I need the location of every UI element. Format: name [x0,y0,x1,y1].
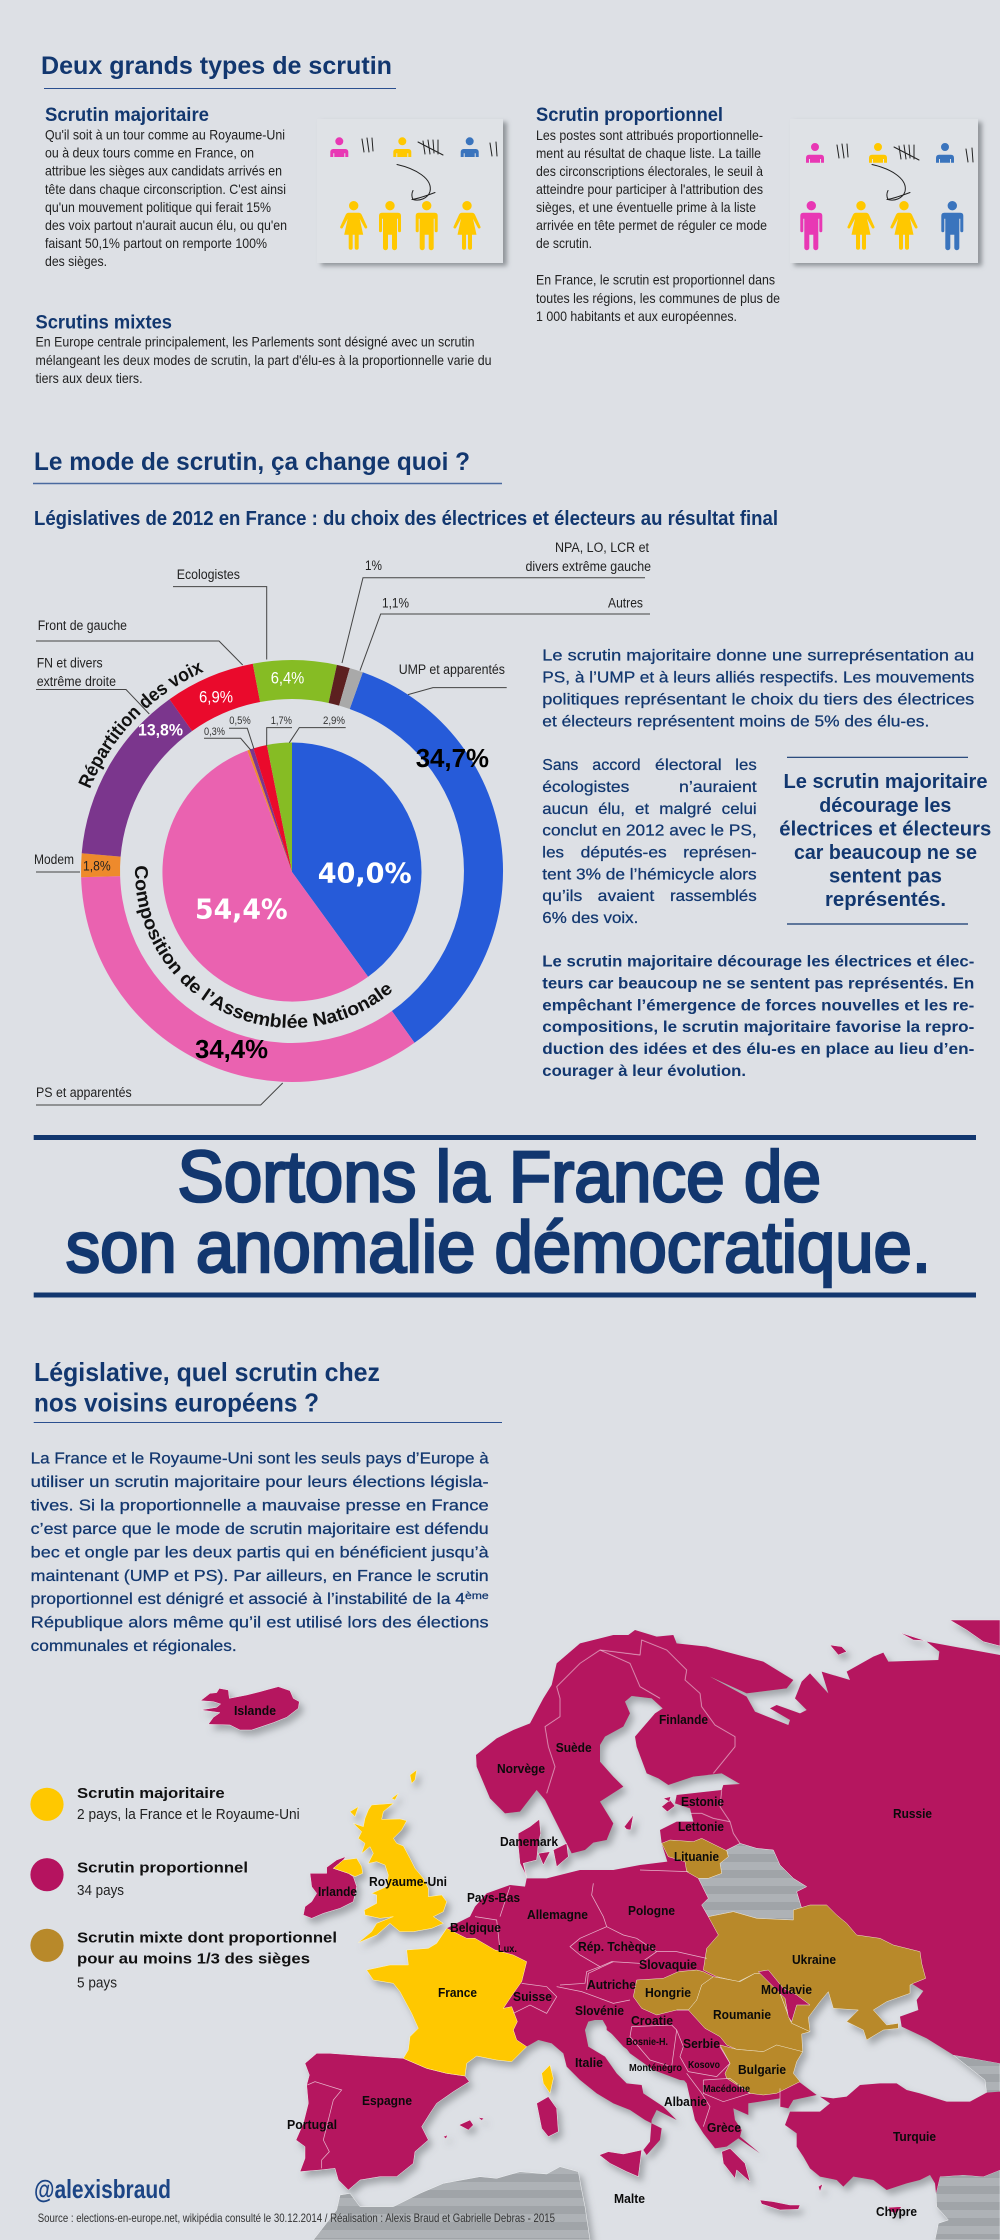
map country labels: Grèce [707,2121,741,2135]
main slogan banner: son anomalie démocratique. [66,1208,931,1288]
map country labels: Royaume-Uni [369,1875,447,1889]
legend item: proportionnel [30,1858,248,1899]
map country labels: Albanie [664,2095,707,2109]
text block: scrutins mixtes: En Europe centrale principalement, les Parlements sont désigné avec un scrutin [36,334,474,350]
map country labels: Turquie [893,2130,936,2144]
panel: illustration scrutin proportionnel [790,119,978,263]
text block: accord électoral: représen- [683,844,757,862]
map country labels: Roumanie [713,2008,771,2022]
callout labels and leader lines: UMP et apparentés [399,662,505,677]
text block: reproduction des élus: compositions, le scrutin majoritaire favorise la repro- [542,1019,974,1036]
callout labels and leader lines: PS et apparentés [36,1085,132,1100]
text block: accord électoral: malgré [659,801,712,818]
value labels: 6,4% [271,669,304,688]
text block: scrutin proportionnel: Scrutin proportionnel [536,104,723,126]
text block: scrutin proportionnel: atteindre pour participer à l'attribution des [536,181,763,197]
callout labels and leader lines: 0,5% [229,715,251,727]
legend item: majoritaire: 2 pays, la France et le Royaume-Uni [77,1806,300,1823]
map country labels: Slovénie [575,2004,624,2018]
map country labels: Slovaquie [639,1958,697,1972]
legend item: mixte: Scrutin mixte dont proportionnel [77,1930,337,1947]
map country labels: Bulgarie [738,2063,786,2077]
map country labels: Lettonie [678,1820,724,1834]
text block: France et Royaume-Uni: tives. Si la proportionnelle a mauvaise presse en France [31,1498,489,1515]
map country labels: Malte [614,2192,645,2206]
Lithuania [662,1838,728,1878]
section heading: voisins européens [34,1357,502,1422]
subtitle: Législatives 2012: Législatives de 2012 en France : du choix des électrices et électeurs au résultat final [34,508,778,530]
text block: accord électoral: et [635,801,650,818]
ring: répartition des voix [81,660,503,1082]
text block: scrutin proportionnel: de scrutin. [536,235,592,251]
curved labels: Composition de l’Assemblée Nationale [134,866,392,1028]
text block: scrutin proportionnel: 1 000 habitants et aux européennes. [536,308,737,324]
text block: reproduction des élus [542,954,974,1080]
callout labels and leader lines: 1% [365,558,382,573]
text block: scrutin proportionnel [536,104,780,324]
text block: surreprésentation [542,648,974,730]
map country labels: Suisse [513,1990,552,2004]
section heading: Le mode de scrutin: Le mode de scrutin, ça change quoi ? [34,448,470,476]
value labels: 1,8% [83,857,111,873]
map country labels: Irlande [318,1885,357,1899]
text block: accord électoral: électoral [655,757,722,774]
text block: scrutins mixtes [36,312,492,386]
text block: scrutin proportionnel: toutes les régions, les communes de plus de [536,290,780,306]
legend item: mixte: pour au moins 1/3 des sièges [77,1950,310,1967]
text block: scrutins mixtes: tiers aux deux tiers. [36,370,142,386]
text block: accord électoral: les [735,757,757,774]
main slogan banner [34,1135,976,1298]
Romania [688,1973,810,2052]
text block: scrutin majoritaire: Scrutin majoritaire [45,104,209,126]
value labels: 13,8% [138,721,183,740]
map country labels: Macédoine [703,2083,750,2095]
map country labels: Pologne [628,1904,675,1918]
text block: accord électoral: les [542,844,564,862]
callout labels and leader lines [34,540,651,1105]
text block: scrutin proportionnel: arrivée en tête permet de réguler ce mode [536,217,767,233]
value labels: 54,4% [195,892,288,926]
text block: scrutins mixtes: Scrutins mixtes [36,312,172,334]
text block: reproduction des élus: empêchant l’émergence de forces nouvelles et les re- [542,997,974,1014]
map country labels: Monténégro [629,2062,682,2074]
curved labels [78,662,392,1028]
callout: le scrutin majoritaire décourage: électrices et électeurs [779,819,991,841]
callout labels and leader lines: Ecologistes [177,567,240,582]
map country labels: Suède [556,1741,592,1755]
grey territories [313,2055,1000,2240]
callout labels and leader lines: divers extrême gauche [526,559,651,574]
callout labels and leader lines: Modem [34,852,74,867]
callout labels and leader lines: 0,3% [204,726,225,738]
callout: le scrutin majoritaire décourage: décourage les [819,795,951,817]
text block: surreprésentation: Le scrutin majoritaire donne une surreprésentation au [542,648,974,665]
map country labels: Serbie [683,2037,720,2051]
text block: France et Royaume-Uni: République alors même qu’il est utilisé lors des élections [31,1615,489,1632]
callout labels and leader lines: 1,1% [382,596,409,611]
text block: accord électoral: celui [722,801,757,818]
text block: reproduction des élus: teurs car beaucoup ne se sentent pas représentés. En [542,976,974,992]
callout: le scrutin majoritaire décourage [779,757,991,924]
value labels: 34,4% [195,1034,268,1064]
text block: reproduction des élus: courager à leur évolution. [542,1063,746,1080]
map country labels: Lux. [498,1943,517,1955]
text block: accord électoral: écologistes [542,779,629,796]
text block: scrutin proportionnel: En France, le scrutin est proportionnel dans [536,272,775,288]
text block: France et Royaume-Uni: maintenant (UMP et PS). Par ailleurs, en France le scrutin [31,1568,489,1585]
text block: scrutin majoritaire: qu'un mouvement politique qui ferait 15% [45,199,271,215]
map country labels: Hongrie [645,1986,691,2000]
legend item: majoritaire: Scrutin majoritaire [77,1785,225,1802]
text block: France et Royaume-Uni [31,1450,489,1655]
map country labels [234,1704,936,2219]
Bulgaria [720,2045,803,2095]
Scandinavia, Russia, Poland, Baltic states [476,1620,1000,2063]
map country labels: Autriche [587,1978,636,1992]
Belarus [698,1843,807,1920]
map country labels: Moldavie [761,1983,812,1997]
legend item: mixte: 5 pays [77,1974,117,1991]
map country labels: Italie [575,2056,603,2070]
map country labels: Finlande [659,1713,708,1727]
text block: accord électoral: 6% des voix. [542,910,638,927]
Ukraine [703,1905,926,2040]
text block: accord électoral: n’auraient [679,779,757,796]
map country labels: Estonie [681,1795,724,1809]
callout labels and leader lines: extrême droite [37,674,116,689]
text block: surreprésentation: politiques représentant le choix du tiers des électrices [542,692,974,708]
text block: accord électoral: élu, [598,801,625,818]
value labels: 40,0% [318,857,412,890]
value labels [83,669,489,1064]
text block: accord électoral: députés-es [581,844,667,862]
text block: France et Royaume-Uni: utiliser un scrutin majoritaire pour leurs élections législa- [31,1474,489,1491]
map country labels: Bosnie-H. [626,2036,668,2048]
map country labels: Islande [234,1704,276,1718]
map country labels: France [438,1986,477,2000]
legend item: majoritaire [30,1785,300,1823]
text block: reproduction des élus: Le scrutin majoritaire décourage les électrices et élec- [542,954,974,971]
text block: reproduction des élus: duction des idées et des élu-es en place au lieu d’en- [542,1041,974,1058]
map country labels: Allemagne [527,1908,588,1922]
text block: scrutin majoritaire: des voix partout n'aurait aucun élu, ou qu'en [45,217,287,233]
main slogan banner: Sortons la France de [178,1138,821,1218]
callout labels and leader lines: Front de gauche [38,618,127,633]
map country labels: Belgique [450,1921,501,1935]
map country labels: Lituanie [674,1850,719,1864]
text block: France et Royaume-Uni: communales et régionales. [31,1638,237,1655]
section heading: Deux grands types de scrutin: Deux grands types de scrutin [41,52,392,80]
map country labels: Norvège [497,1762,545,1776]
text block: accord électoral: aucun [542,801,588,818]
legend item: proportionnel: 34 pays [77,1882,124,1899]
map country labels: Chypre [876,2205,917,2219]
map country labels: Kosovo [688,2059,720,2071]
text block: France et Royaume-Uni: ème [465,1591,489,1602]
Balkans, Turkey, Eastern Europe [607,1905,1000,2213]
callout: le scrutin majoritaire décourage: car beaucoup ne se [794,842,977,864]
text block: accord électoral: rassemblés [670,888,757,905]
text block: accord électoral: conclut en 2012 avec le PS, [542,823,757,840]
callout: le scrutin majoritaire décourage: représentés. [825,889,946,911]
text block: France et Royaume-Uni: bec et ongle par les deux partis qui en bénéficient jusqu’à [31,1544,489,1561]
map country labels: Danemark [500,1835,558,1849]
map country labels: Pays-Bas [467,1891,520,1905]
value labels: 6,9% [199,687,233,706]
text block: accord électoral: accord [592,757,641,774]
map country labels: Espagne [362,2094,412,2108]
map borders [307,1640,780,2168]
map country labels: Portugal [287,2118,337,2132]
text block: scrutin majoritaire: des sièges. [45,253,107,269]
callout: le scrutin majoritaire décourage: Le scrutin majoritaire [784,771,988,793]
text block: accord électoral: tent 3% de l’hémicycle alors [542,866,757,883]
text block: France et Royaume-Uni: La France et le Royaume-Uni sont les seuls pays d’Europe à [31,1450,489,1467]
map country labels: Ukraine [792,1953,836,1967]
text block: accord électoral [542,757,757,927]
text block: scrutin majoritaire: faisant 50,1% partout on remporte 100% [45,235,267,251]
author handle: @alexisbraud [34,2174,171,2204]
text block: scrutin majoritaire: Qu'il soit à un tour comme au Royaume-Uni [45,126,285,142]
map country labels: Russie [893,1807,932,1821]
text block: scrutin majoritaire [45,104,287,269]
text block: scrutins mixtes: mélangeant les deux modes de scrutin, la part d'élu-es à la proportionnelle varie du [36,352,492,368]
section heading: voisins européens: nos voisins européens ? [34,1388,319,1418]
Hungary [633,1970,713,2015]
map country labels: Rép. Tchèque [578,1940,656,1954]
text block: France et Royaume-Uni: c’est parce que le mode de scrutin majoritaire est défendu [31,1521,489,1538]
text block: scrutin proportionnel: sièges, et une éventuelle prime à la liste [536,199,756,215]
text block: scrutin majoritaire: tête dans chaque circonscription. C'est ainsi [45,181,286,197]
callout labels and leader lines: 1,7% [271,715,292,727]
callout labels and leader lines: Autres [608,596,643,611]
panel: illustration scrutin majoritaire [317,119,503,263]
Denmark, Iceland, Ireland, Western continent [201,1687,613,2020]
United Kingdom [333,1770,447,1943]
text block: scrutin majoritaire: attribue les sièges aux candidats arrivés en [45,163,282,179]
legend item: mixte [30,1929,337,1991]
text block: accord électoral: qu’ils [542,888,582,905]
map of Europe [201,1620,1000,2240]
callout labels and leader lines: 2,9% [323,715,345,727]
chart: double ring votes and seats [34,540,651,1106]
text block: France et Royaume-Uni: proportionnel est dénigré et associé à l’instabilité de la 4 [31,1591,465,1608]
curved labels: Répartition des voix [78,662,204,788]
callout labels and leader lines: FN et divers [37,656,103,671]
text block: surreprésentation: et électeurs représentent moins de 5% des élu-es. [542,714,929,730]
text block: accord électoral: avaient [598,888,655,905]
text block: scrutin majoritaire: ou à deux tours comme en France, on [45,145,254,161]
map country labels: Croatie [631,2014,673,2028]
Italy, Iberia, islands, France [296,1928,713,2190]
source line: Source : elections-en-europe.net, wikipédia consulté le 30.12.2014 / Réalisation : Alexis Braud et Gabrielle Debras - 2015 [38,2211,555,2225]
text block: scrutin proportionnel: des circonscriptions électorales, le seuil à [536,163,763,179]
France [367,1928,553,2093]
value labels: 34,7% [416,743,489,773]
section heading: voisins européens: Législative, quel scrutin chez [34,1357,380,1387]
text block: surreprésentation: PS, à l’UMP et à leurs alliés respectifs. Les mouvements [542,670,974,686]
text block: accord électoral: Sans [542,757,578,774]
legend [30,1785,337,1991]
legend item: proportionnel: Scrutin proportionnel [77,1859,248,1876]
text block: scrutin proportionnel: Les postes sont attribués proportionnelle- [536,127,763,143]
callout: le scrutin majoritaire décourage: sentent pas [829,866,942,888]
pie: composition de l'Assemblée [162,742,422,1002]
Moldova [758,1970,810,2022]
text block: scrutin proportionnel: ment au résultat de chaque liste. La taille [536,145,761,161]
callout labels and leader lines: NPA, LO, LCR et [555,540,649,555]
